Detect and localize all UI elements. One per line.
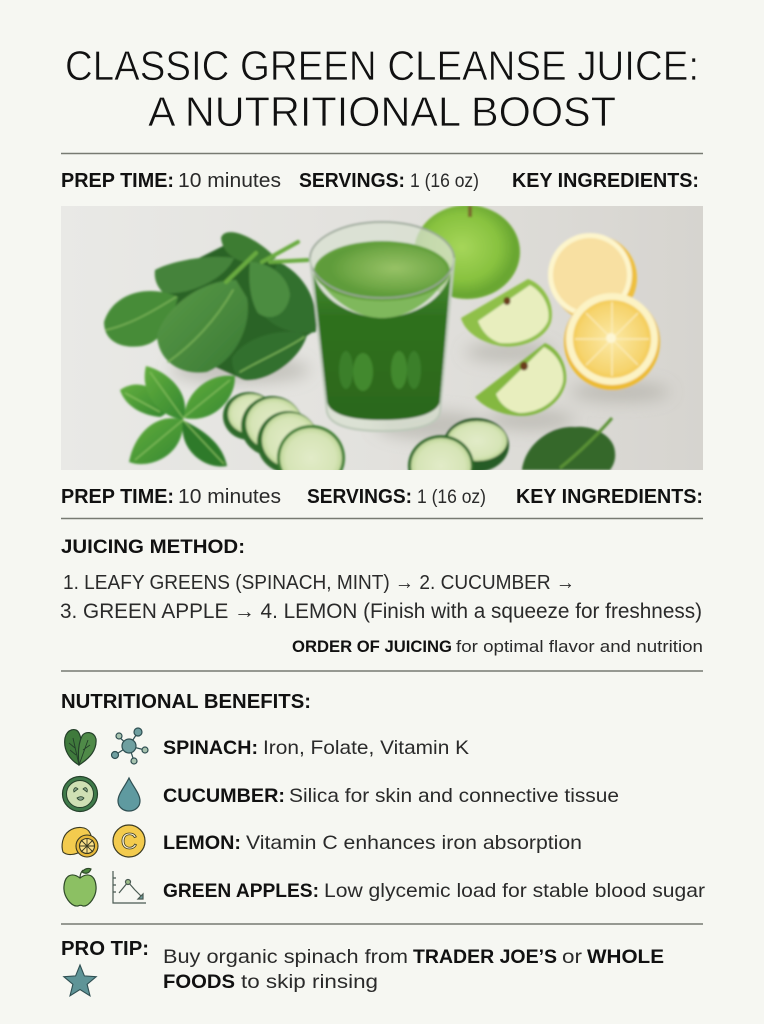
title xyxy=(65,42,699,135)
bottom meta row: 10 minutes xyxy=(178,486,281,508)
nutritional benefits heading: NUTRITIONAL BENEFITS: xyxy=(61,691,311,713)
icon: spinach leaves xyxy=(65,730,96,765)
ingredient photo xyxy=(61,205,703,497)
benefit: cucumber: CUCUMBER: xyxy=(163,785,285,807)
icon: vitamin C coin xyxy=(113,825,145,857)
juicing method heading: JUICING METHOD: xyxy=(61,536,245,558)
juicing order note: for optimal flavor and nutrition xyxy=(456,638,703,656)
pro tip text: TRADER JOE’S xyxy=(413,946,557,968)
benefit: lemon: Vitamin C enhances iron absorption xyxy=(246,832,582,854)
benefit: spinach: SPINACH: xyxy=(163,737,258,759)
icon: vitamin C coin: C xyxy=(121,828,137,854)
top meta row: 1 (16 oz) xyxy=(410,171,479,192)
top meta row: KEY INGREDIENTS: xyxy=(512,170,699,192)
bottom meta row: PREP TIME: xyxy=(61,486,174,508)
icon: lemon with slice xyxy=(62,827,98,857)
pro tip heading: PRO TIP: xyxy=(61,938,149,960)
juice glass xyxy=(310,222,454,431)
bottom meta row: SERVINGS: xyxy=(307,486,412,508)
juicing steps: 1. LEAFY GREENS (SPINACH, MINT) → 2. CUCUMBER → xyxy=(63,571,575,594)
juicing order note: ORDER OF JUICING xyxy=(292,638,452,656)
pro tip text: FOODS xyxy=(163,971,235,993)
spinach pile xyxy=(104,232,316,380)
bottom meta row: 1 (16 oz) xyxy=(417,487,486,508)
cucumber slices left xyxy=(221,390,347,470)
benefit: green apples xyxy=(163,880,706,902)
pro tip text: to skip rinsing xyxy=(241,971,378,993)
title: A NUTRITIONAL BOOST xyxy=(148,88,616,135)
benefit: green apples: GREEN APPLES: xyxy=(163,880,319,902)
juicing steps: 3. GREEN APPLE → 4. LEMON (Finish with a squeeze for freshness) xyxy=(60,600,702,623)
cucumber slices right xyxy=(406,416,511,470)
juicing steps xyxy=(60,571,702,623)
pro tip text: WHOLE xyxy=(587,946,664,968)
top meta row: SERVINGS: xyxy=(299,170,405,192)
benefit: cucumber xyxy=(163,785,619,807)
top meta row: PREP TIME: xyxy=(61,170,174,192)
bottom meta row xyxy=(61,486,703,508)
spinach leaf xyxy=(522,418,615,470)
icon: star xyxy=(64,965,96,996)
juicing order note xyxy=(292,638,703,656)
benefit: cucumber: Silica for skin and connective tissue xyxy=(289,785,619,807)
icon: green apple xyxy=(64,868,96,906)
lemons xyxy=(548,233,660,390)
icon: molecule xyxy=(112,728,148,764)
top meta row xyxy=(61,170,699,192)
icon: cucumber slice xyxy=(62,776,98,812)
benefit: lemon: LEMON: xyxy=(163,832,241,854)
apple slices xyxy=(461,279,566,416)
icon: water drop xyxy=(118,778,140,811)
pro tip text: Buy organic spinach from xyxy=(163,946,408,968)
benefit: spinach xyxy=(163,737,469,759)
pro tip text xyxy=(163,946,664,993)
shadows xyxy=(170,342,670,439)
title: CLASSIC GREEN CLEANSE JUICE: xyxy=(65,42,699,89)
icon: falling line chart xyxy=(113,871,146,903)
green apple whole xyxy=(414,205,520,299)
pro tip text: or xyxy=(562,946,583,968)
mint sprig xyxy=(120,366,235,467)
bottom meta row: KEY INGREDIENTS: xyxy=(516,486,703,508)
top meta row: 10 minutes xyxy=(178,170,281,192)
benefit: green apples: Low glycemic load for stable blood sugar xyxy=(324,880,706,902)
benefit: spinach: Iron, Folate, Vitamin K xyxy=(263,737,469,759)
